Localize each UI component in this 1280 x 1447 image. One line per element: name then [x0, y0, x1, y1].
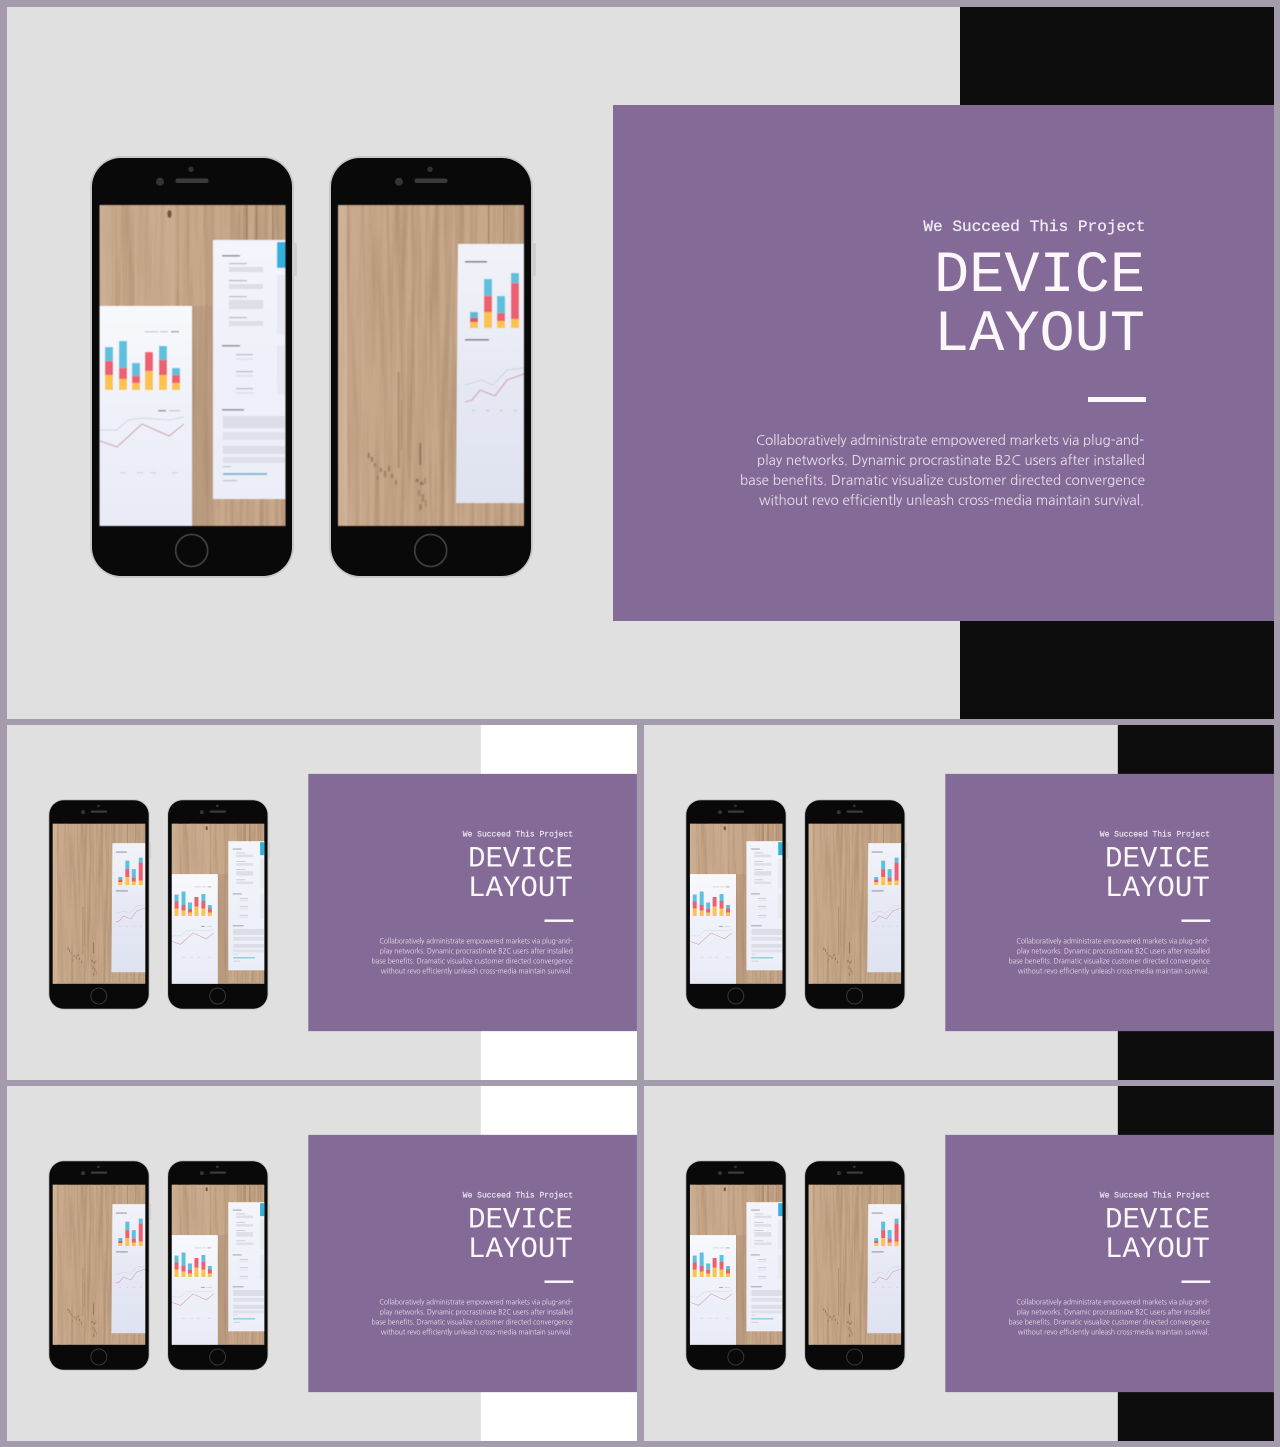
panel: slide 5 black band	[644, 1086, 1274, 1441]
body text: Collaboratively administrate empowered markets via plug-and-	[379, 1298, 573, 1305]
panel: slide 2 white band	[7, 725, 637, 1080]
tagline: We Succeed This Project	[1100, 1192, 1210, 1201]
purple text panel	[308, 1135, 637, 1392]
body text: base benefits. Dramatic visualize customer directed convergence	[1008, 957, 1210, 964]
title	[468, 1204, 573, 1266]
black accent band	[1118, 725, 1274, 1080]
title: DEVICE	[1105, 1204, 1210, 1237]
panel: main slide	[7, 7, 1274, 719]
title: LAYOUT	[934, 301, 1145, 368]
body text	[371, 937, 573, 974]
phone: left device	[48, 799, 151, 1010]
slide background	[644, 725, 1274, 1080]
slide background	[7, 725, 637, 1080]
purple text panel	[945, 774, 1274, 1031]
white divider bar	[544, 919, 573, 922]
purple text panel	[945, 1135, 1274, 1392]
white divider bar	[1088, 397, 1146, 402]
tagline: We Succeed This Project	[463, 1192, 573, 1201]
title	[1105, 1204, 1210, 1266]
body text: base benefits. Dramatic visualize customer directed convergence	[371, 1318, 573, 1325]
purple text panel	[308, 774, 637, 1031]
title: DEVICE	[1105, 843, 1210, 876]
body text: Collaboratively administrate empowered markets via plug-and-	[379, 937, 573, 944]
phone: right device	[329, 156, 536, 578]
slide background	[7, 1086, 637, 1441]
body text: Collaboratively administrate empowered markets via plug-and-	[756, 433, 1144, 447]
phone: right device	[804, 799, 907, 1010]
phone: left device	[685, 1160, 788, 1371]
panel: slide 3 black band	[644, 725, 1274, 1080]
tagline: We Succeed This Project	[923, 218, 1146, 236]
body text: without revo efficiently unleash cross-media maintain survival.	[381, 967, 572, 974]
black accent band	[960, 7, 1274, 719]
phone: left device	[48, 1160, 151, 1371]
title: DEVICE	[934, 242, 1145, 309]
body text	[1008, 937, 1210, 974]
phone: left device	[685, 799, 788, 1010]
body text: base benefits. Dramatic visualize customer directed convergence	[371, 957, 573, 964]
body text: without revo efficiently unleash cross-media maintain survival.	[381, 1328, 572, 1335]
title: LAYOUT	[1105, 1233, 1210, 1266]
body text: without revo efficiently unleash cross-media maintain survival.	[759, 493, 1144, 507]
body text	[1008, 1298, 1210, 1335]
title: DEVICE	[468, 1204, 573, 1237]
white divider bar	[1181, 1280, 1210, 1283]
slide background	[644, 1086, 1274, 1441]
title: LAYOUT	[468, 1233, 573, 1266]
title	[468, 843, 573, 905]
body text	[371, 1298, 573, 1335]
body text: play networks. Dynamic procrastinate B2C users after installed	[757, 453, 1145, 467]
white divider bar	[1181, 919, 1210, 922]
slide background	[7, 7, 1274, 719]
tagline: We Succeed This Project	[463, 831, 573, 840]
body text: base benefits. Dramatic visualize customer directed convergence	[740, 473, 1145, 487]
body text: play networks. Dynamic procrastinate B2C users after installed	[1017, 947, 1210, 954]
body text: Collaboratively administrate empowered markets via plug-and-	[1016, 937, 1210, 944]
body text	[740, 433, 1145, 507]
panel: slide 4 white band	[7, 1086, 637, 1441]
white accent band	[481, 725, 637, 1080]
title	[1105, 843, 1210, 905]
white accent band	[481, 1086, 637, 1441]
black accent band	[1118, 1086, 1274, 1441]
phone: left device	[90, 156, 297, 578]
title: DEVICE	[468, 843, 573, 876]
phone: right device	[167, 799, 270, 1010]
body text: without revo efficiently unleash cross-media maintain survival.	[1018, 967, 1209, 974]
body text: play networks. Dynamic procrastinate B2C users after installed	[380, 947, 573, 954]
tagline: We Succeed This Project	[1100, 831, 1210, 840]
title: LAYOUT	[468, 872, 573, 905]
purple text panel	[613, 105, 1274, 621]
body text: without revo efficiently unleash cross-media maintain survival.	[1018, 1328, 1209, 1335]
body text: play networks. Dynamic procrastinate B2C users after installed	[1017, 1308, 1210, 1315]
phone: right device	[167, 1160, 270, 1371]
title: LAYOUT	[1105, 872, 1210, 905]
title	[934, 242, 1145, 368]
phone: right device	[804, 1160, 907, 1371]
body text: Collaboratively administrate empowered markets via plug-and-	[1016, 1298, 1210, 1305]
body text: base benefits. Dramatic visualize customer directed convergence	[1008, 1318, 1210, 1325]
white divider bar	[544, 1280, 573, 1283]
body text: play networks. Dynamic procrastinate B2C users after installed	[380, 1308, 573, 1315]
